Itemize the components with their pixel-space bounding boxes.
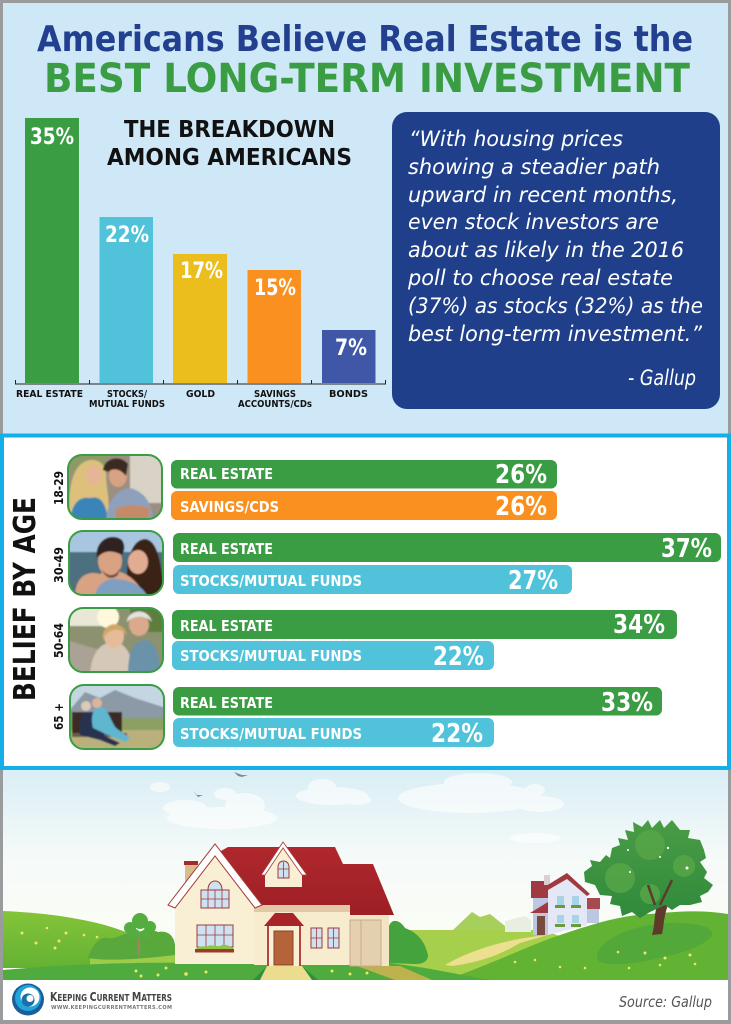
vertical heading: BELIEF BY AGE bbox=[8, 497, 43, 701]
lower meadow behind bushes bbox=[90, 955, 178, 968]
bar: stocks 27% bbox=[173, 565, 572, 596]
bar: savings 26% bbox=[171, 491, 557, 522]
panel: belief by age bbox=[2, 436, 729, 768]
bar: gold 17% bbox=[173, 254, 227, 383]
age group 50-64: 50-64 bbox=[51, 623, 66, 658]
axis labels: STOCKS/ bbox=[107, 389, 147, 400]
front path bbox=[253, 966, 318, 980]
quote panel: “With housing prices bbox=[409, 127, 623, 151]
bar: real estate 37%: REAL ESTATE bbox=[180, 540, 273, 558]
age group 30-49: 30-49 bbox=[51, 547, 66, 583]
roof bbox=[205, 847, 394, 915]
bar: real estate 37%: 37% bbox=[661, 534, 712, 564]
quote panel: best long-term investment.” bbox=[408, 322, 703, 346]
quote panel: (37%) as stocks (32%) as the bbox=[408, 294, 703, 318]
bar: real estate 33% bbox=[173, 687, 662, 718]
bar: real estate 34%: REAL ESTATE bbox=[180, 617, 273, 635]
bar: stocks 22% bbox=[172, 641, 494, 672]
middle meadow bbox=[389, 930, 600, 980]
foreground grass bbox=[3, 963, 490, 980]
right hill bbox=[445, 911, 728, 980]
age group 50-64 bbox=[51, 606, 677, 674]
bar: real estate 33%: 33% bbox=[601, 688, 653, 718]
bush right of house bbox=[389, 921, 428, 964]
small house bbox=[530, 873, 600, 935]
age group 65+ bbox=[51, 683, 662, 751]
quote panel: showing a steadier path bbox=[408, 155, 660, 179]
bar: real estate 37% bbox=[173, 533, 721, 564]
quote panel: upward in recent months, bbox=[408, 183, 678, 207]
logo text: WWW.KEEPINGCURRENTMATTERS.COM bbox=[51, 1005, 172, 1011]
chimney bbox=[185, 861, 197, 883]
axis labels: ACCOUNTS/CDs bbox=[238, 399, 312, 410]
front path surface bbox=[260, 966, 312, 980]
quote panel: poll to choose real estate bbox=[407, 266, 673, 290]
far hills right bbox=[453, 912, 510, 930]
lower wall bbox=[254, 905, 350, 965]
bar: savings 26%: SAVINGS/CDS bbox=[180, 498, 279, 516]
quote panel bbox=[392, 112, 720, 409]
age group 65+: 65 + bbox=[51, 703, 66, 730]
bar: real estate 34%: 34% bbox=[613, 610, 665, 640]
chart heading: THE BREAKDOWN bbox=[124, 117, 335, 143]
axis labels: BONDS bbox=[329, 389, 368, 400]
birds bbox=[193, 772, 248, 797]
bar: stocks 22%: STOCKS/MUTUAL FUNDS bbox=[180, 725, 362, 743]
bar: stocks 22%: 22% bbox=[433, 642, 484, 672]
photo: young couple bbox=[66, 453, 164, 521]
bar: gold 17%: 17% bbox=[180, 259, 223, 284]
bar: stocks 22%: 22% bbox=[105, 223, 149, 248]
dormer bbox=[261, 842, 307, 887]
logo text bbox=[50, 989, 172, 1011]
quote panel: even stock investors are bbox=[408, 210, 659, 234]
age group 30-49 bbox=[51, 529, 721, 597]
porch bbox=[264, 913, 304, 966]
flower box bbox=[195, 945, 234, 952]
axis labels: MUTUAL FUNDS bbox=[89, 399, 165, 410]
side windows bbox=[311, 928, 339, 948]
bar: stocks 22% bbox=[100, 217, 153, 383]
photo: older couple outdoors bbox=[66, 606, 164, 674]
bar: real estate 26%: 26% bbox=[495, 460, 547, 490]
axis labels bbox=[16, 389, 368, 410]
title: BEST LONG-TERM INVESTMENT bbox=[44, 56, 691, 102]
illustration: landscape with houses bbox=[3, 770, 728, 980]
bar: real estate 26% bbox=[171, 460, 557, 490]
photo: couple at the sea bbox=[66, 529, 164, 597]
bar: stocks 22%: STOCKS/MUTUAL FUNDS bbox=[180, 647, 362, 665]
chart axis bbox=[15, 380, 386, 384]
small tree bbox=[124, 913, 156, 955]
bar: stocks 22% bbox=[173, 718, 494, 749]
hill shade bbox=[597, 923, 712, 964]
bar: stocks 27%: 27% bbox=[508, 566, 558, 596]
gable trim bbox=[168, 844, 262, 908]
bar: stocks 27%: STOCKS/MUTUAL FUNDS bbox=[180, 572, 362, 590]
axis labels: REAL ESTATE bbox=[16, 389, 83, 400]
bar: bonds 7%: 7% bbox=[335, 336, 367, 361]
bar: real estate 34% bbox=[172, 610, 677, 640]
bar: real estate 35%: 35% bbox=[30, 125, 74, 150]
garage bbox=[350, 915, 389, 966]
photo: seniors on a bench bbox=[68, 683, 166, 751]
sky bbox=[3, 770, 728, 980]
axis labels: GOLD bbox=[186, 389, 215, 400]
age group 18-29: 18-29 bbox=[51, 471, 66, 505]
clouds bbox=[150, 773, 564, 843]
axis labels: SAVINGS bbox=[254, 389, 296, 400]
distant fence bbox=[505, 916, 531, 932]
main gable wall bbox=[175, 852, 254, 964]
main house bbox=[168, 842, 394, 980]
quote panel: about as likely in the 2016 bbox=[408, 238, 684, 262]
bushes left bbox=[88, 930, 175, 960]
garden path bbox=[445, 935, 548, 966]
logo text: KEEPING CURRENT MATTERS bbox=[50, 989, 172, 1004]
chart heading: AMONG AMERICANS bbox=[107, 145, 352, 171]
footer bbox=[3, 980, 728, 1020]
bar: savings 26%: 26% bbox=[495, 492, 547, 522]
chart heading bbox=[107, 117, 352, 171]
bar: stocks 22%: 22% bbox=[431, 719, 483, 749]
left hill bbox=[3, 911, 178, 968]
tan strip bbox=[357, 966, 432, 980]
logo swirl bbox=[12, 984, 44, 1016]
flowers bbox=[20, 927, 696, 978]
bar: bonds 7% bbox=[322, 330, 376, 383]
bar: real estate 33%: REAL ESTATE bbox=[180, 694, 273, 712]
quote panel: - Gallup bbox=[628, 366, 696, 390]
bar: savings 15%: 15% bbox=[254, 276, 296, 301]
age group 18-29 bbox=[51, 453, 557, 522]
lower window bbox=[197, 925, 233, 947]
bar: real estate 35% bbox=[25, 118, 79, 383]
bar: savings 15% bbox=[248, 270, 301, 383]
upper window bbox=[201, 881, 229, 908]
top panel background bbox=[3, 3, 728, 434]
bar chart: the breakdown among Americans bbox=[15, 117, 386, 410]
title bbox=[37, 19, 693, 102]
bar: real estate 26%: REAL ESTATE bbox=[180, 465, 273, 483]
tree bbox=[584, 820, 713, 935]
source note: Source: Gallup bbox=[619, 993, 712, 1011]
